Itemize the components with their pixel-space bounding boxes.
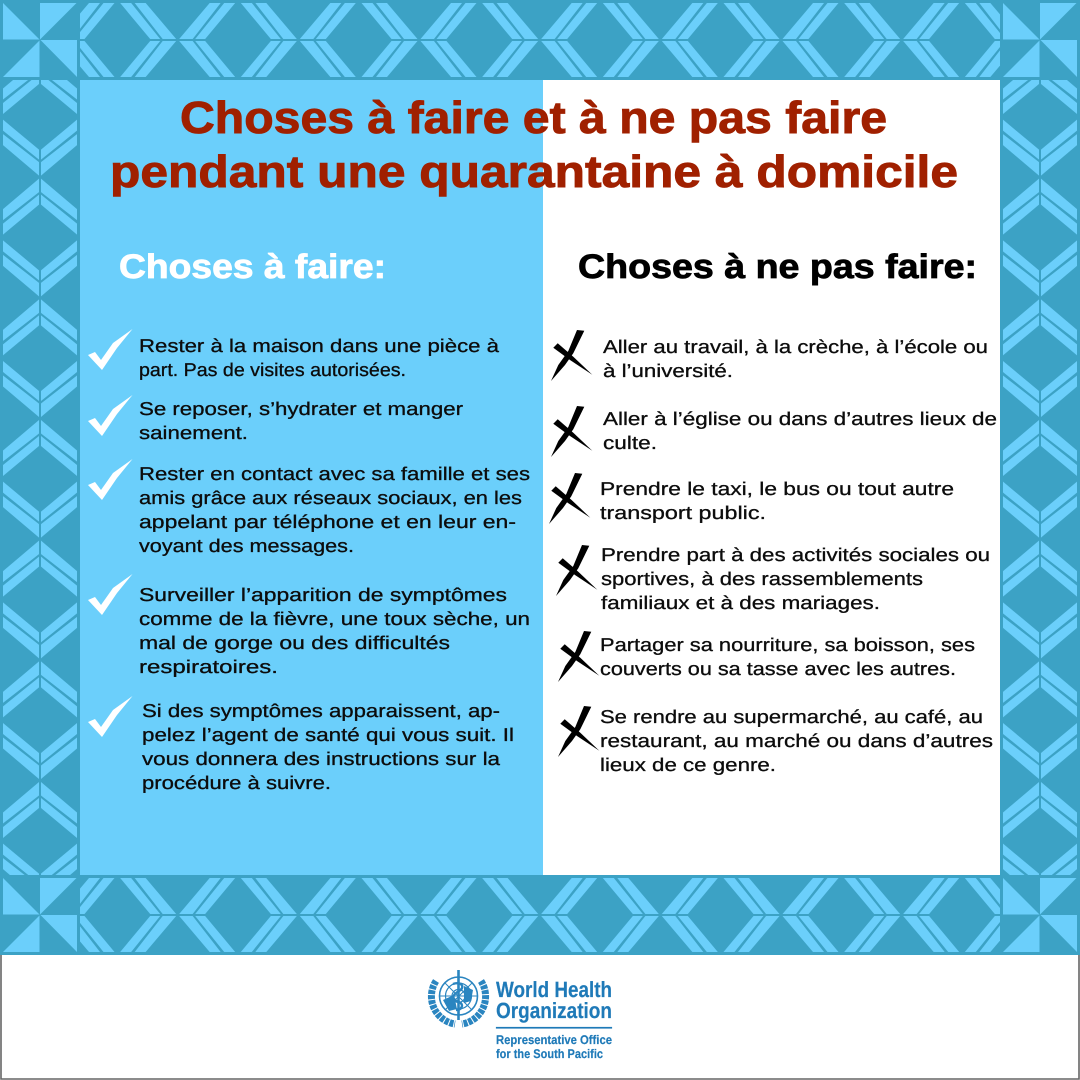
item 2: [88, 395, 463, 443]
item 4: comme de la fièvre, une toux sèche, un: [139, 608, 530, 629]
logo wordmark: Representative Office: [496, 1033, 612, 1047]
item 6: Se rendre au supermarché, au café, au: [600, 706, 983, 727]
item 3: [549, 473, 954, 524]
logo wordmark: Organization: [496, 998, 612, 1023]
list: do: [88, 329, 530, 793]
WHO logo: [431, 970, 612, 1061]
item 3: transport public.: [600, 502, 766, 523]
item 5: [558, 631, 975, 682]
logo wordmark: World Health: [496, 977, 612, 1002]
item 1: Aller au travail, à la crèche, à l’école ou: [603, 336, 988, 357]
item 4: mal de gorge ou des difficultés: [139, 632, 450, 653]
footer frame: [1, 955, 1079, 1079]
item 3: Rester en contact avec sa famille et ses: [139, 463, 530, 484]
item 5: Si des symptômes apparaissent, ap-: [142, 700, 500, 721]
item 3: Prendre le taxi, le bus ou tout autre: [600, 478, 954, 499]
list: don't: [549, 330, 997, 775]
item 4: [556, 544, 990, 613]
item 3: appelant par téléphone et en leur en-: [139, 511, 516, 532]
item 1: Rester à la maison dans une pièce à: [139, 335, 500, 356]
item 4: [88, 574, 530, 677]
title: pendant une quarantaine à domicile: [110, 146, 958, 197]
item 4: respiratoires.: [139, 656, 278, 677]
logo wordmark: for the South Pacific: [496, 1047, 603, 1061]
item 2: [551, 406, 997, 457]
heading: don't: Choses à ne pas faire:: [578, 248, 977, 286]
item 2: Se reposer, s’hydrater et manger: [139, 398, 463, 419]
logo wordmark: [496, 977, 612, 1061]
item 4: familiaux et à des mariages.: [601, 592, 880, 613]
item 6: [558, 706, 993, 775]
item 2: Aller à l’église ou dans d’autres lieux de: [603, 408, 997, 429]
item 1: à l’université.: [603, 360, 733, 381]
top border band: [80, 3, 1000, 77]
item 3: [88, 459, 530, 556]
panel: do (blue): [80, 80, 543, 875]
right border band: [1003, 80, 1077, 875]
item 2: culte.: [603, 432, 657, 453]
item 5: procédure à suivre.: [142, 772, 331, 793]
item 6: restaurant, au marché ou dans d’autres: [600, 730, 993, 751]
title: [110, 92, 958, 197]
item 6: lieux de ce genre.: [600, 754, 776, 775]
heading: do: Choses à faire:: [119, 248, 386, 286]
item 1: part. Pas de visites autorisées.: [139, 359, 406, 380]
item 1: [88, 329, 500, 380]
item 5: couverts ou sa tasse avec les autres.: [600, 658, 956, 679]
item 5: [88, 696, 514, 793]
item 3: voyant des messages.: [139, 535, 354, 556]
left border band: [3, 80, 77, 875]
item 3: amis grâce aux réseaux sociaux, en les: [139, 487, 522, 508]
icon: WHO emblem: [431, 970, 486, 1024]
item 2: sainement.: [139, 422, 248, 443]
item 4: sportives, à des rassemblements: [601, 568, 923, 589]
title: Choses à faire et à ne pas faire: [180, 92, 887, 143]
item 1: [551, 330, 988, 381]
item 5: pelez l’agent de santé qui vous suit. Il: [142, 724, 514, 745]
panel: don't (white): [543, 80, 1000, 875]
bottom border band: [80, 878, 1000, 952]
item 5: vous donnera des instructions sur la: [142, 748, 501, 769]
item 4: Prendre part à des activités sociales ou: [601, 544, 990, 565]
item 5: Partager sa nourriture, sa boisson, ses: [600, 634, 975, 655]
item 4: Surveiller l’apparition de symptômes: [139, 584, 507, 605]
